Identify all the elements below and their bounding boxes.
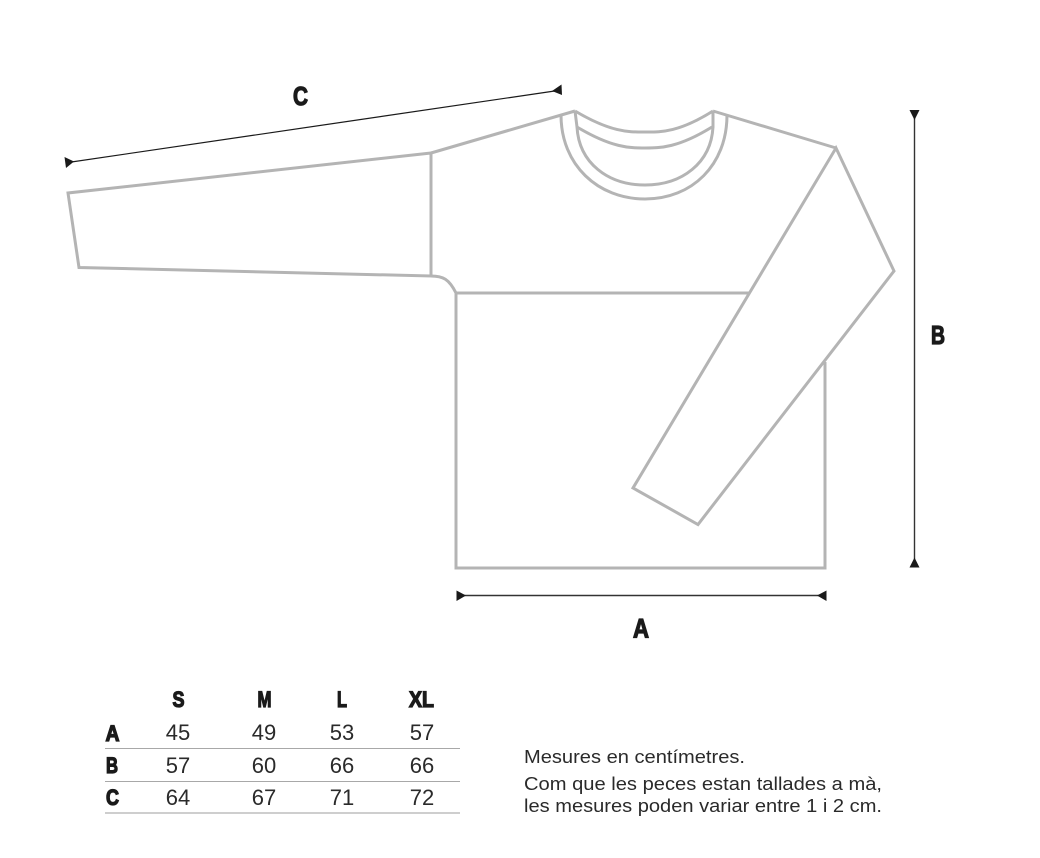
row B: 66 [410, 753, 434, 778]
table header: L [337, 687, 347, 712]
row C: 71 [330, 785, 354, 810]
body [431, 276, 825, 568]
row A [106, 720, 434, 746]
collar [561, 111, 727, 199]
row B: 66 [330, 753, 354, 778]
row A: 53 [330, 720, 354, 745]
row B [106, 753, 434, 778]
note text: les mesures poden variar entre 1 i 2 cm. [524, 796, 882, 816]
row C: 64 [166, 785, 190, 810]
row A: A [106, 721, 120, 746]
size table [105, 687, 460, 813]
row C: 72 [410, 785, 434, 810]
garment outline: long-sleeve sweater [68, 111, 894, 568]
row B: 60 [252, 753, 276, 778]
arrow A: chest width [456, 590, 826, 601]
note text: Mesures en centímetres. [524, 747, 745, 767]
arrow B: total length [910, 110, 920, 568]
shoulders [431, 111, 836, 153]
table header: XL [409, 687, 434, 712]
label B: B [931, 320, 945, 350]
label C: C [293, 81, 308, 111]
arrow C: sleeve length [64, 84, 562, 168]
row A: 45 [166, 720, 190, 745]
label A: A [633, 614, 649, 644]
chest seam [456, 292, 749, 294]
row C: C [106, 785, 119, 810]
row B: 57 [166, 753, 190, 778]
table header: M [258, 687, 272, 712]
table header: S [172, 687, 184, 712]
row B: B [106, 753, 118, 778]
note text [524, 747, 882, 816]
row C [106, 785, 434, 810]
row A: 49 [252, 720, 276, 745]
table header [172, 687, 434, 712]
right sleeve [633, 148, 894, 524]
row C: 67 [252, 785, 276, 810]
row A: 57 [410, 720, 434, 745]
note text: Com que les peces estan tallades a mà, [524, 774, 882, 794]
left sleeve [68, 153, 431, 276]
